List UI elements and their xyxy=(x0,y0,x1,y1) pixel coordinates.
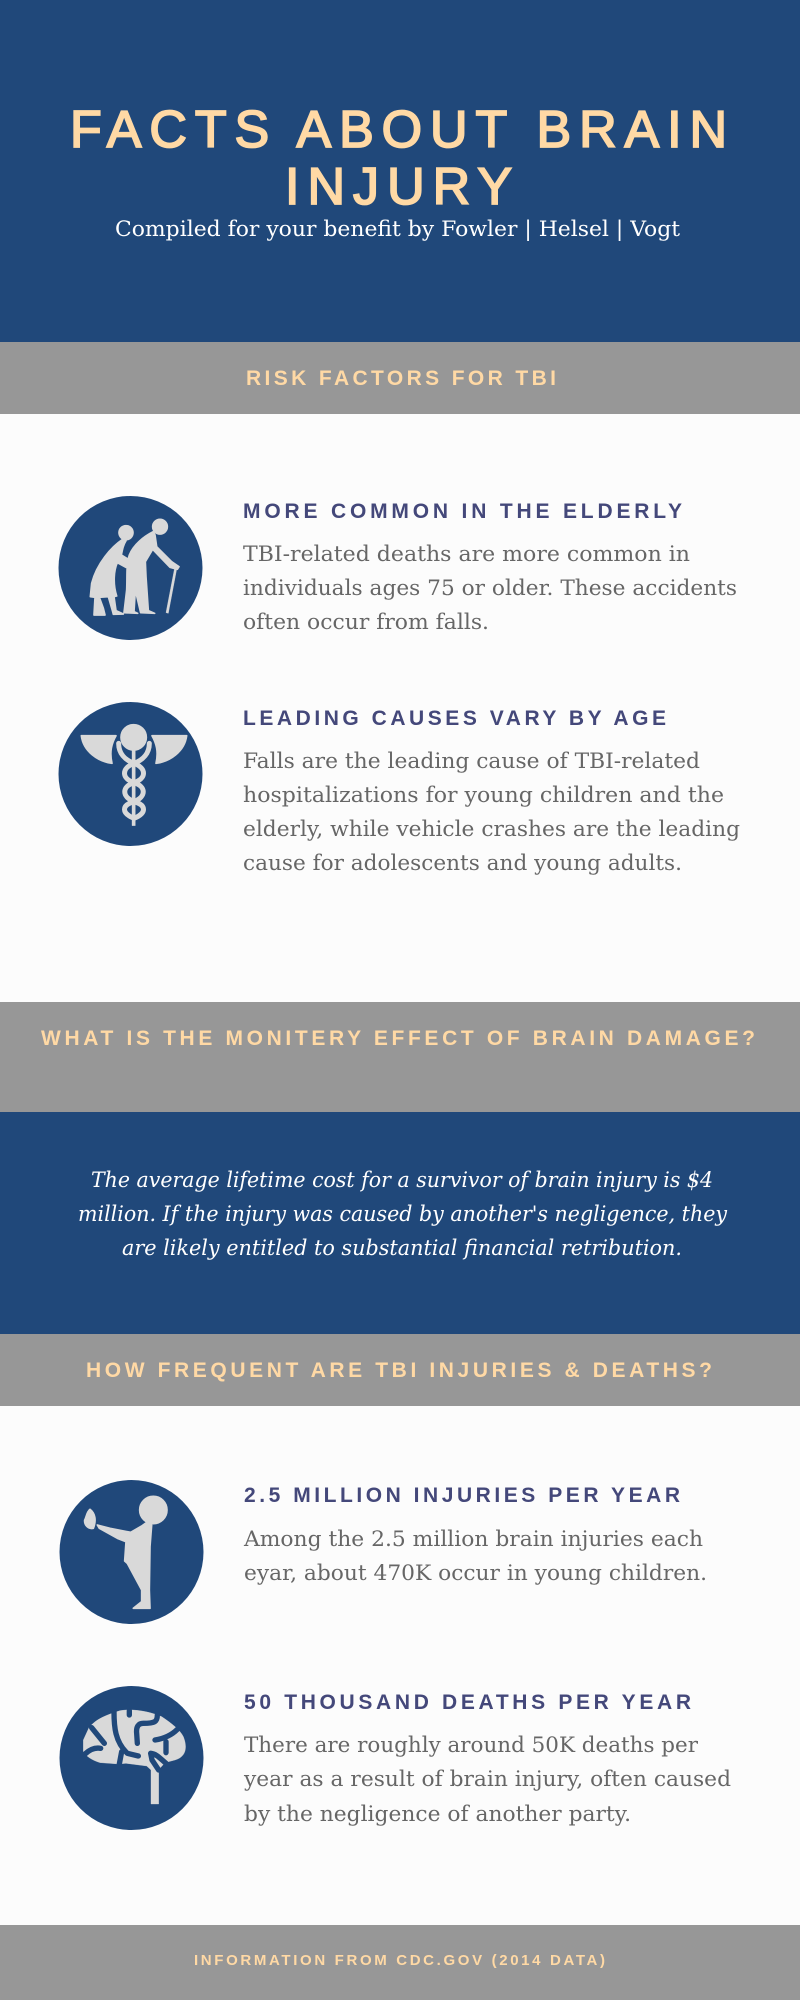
text block: elderly description: TBI-related deaths are more common in xyxy=(243,542,690,566)
text block: leading causes description xyxy=(243,749,740,875)
title: FACTS ABOUT BRAIN xyxy=(70,101,727,159)
section heading bar: monetary effect xyxy=(0,1002,800,1112)
heading: leading causes vary by age: LEADING CAUSES VARY BY AGE xyxy=(243,707,666,730)
title xyxy=(70,101,727,216)
icon: caduceus xyxy=(58,702,202,846)
text block: injuries description: Among the 2.5 million brain injuries each xyxy=(243,1527,703,1551)
section heading bar: risk factors xyxy=(0,342,800,414)
text block: leading causes description: cause for adolescents and young adults. xyxy=(243,851,682,875)
text block: leading causes description: elderly, while vehicle crashes are the leading xyxy=(243,817,740,841)
heading: 2.5 million injuries per year: 2.5 MILLION INJURIES PER YEAR xyxy=(244,1484,680,1507)
subtitle: Compiled for your benefit by Fowler | Helsel | Vogt xyxy=(115,217,681,242)
icon: brain xyxy=(60,1686,204,1830)
text block: deaths description xyxy=(243,1733,731,1826)
text block: elderly description: individuals ages 75 or older. These accidents xyxy=(243,576,737,600)
text block: deaths description: year as a result of brain injury, often caused xyxy=(243,1767,731,1791)
text block: deaths description: There are roughly around 50K deaths per xyxy=(244,1733,699,1757)
text block: injuries description xyxy=(243,1527,707,1585)
panel: elderly risk factor xyxy=(58,496,737,640)
section heading bar: frequency: HOW FREQUENT ARE TBI INJURIES & DEATHS? xyxy=(86,1359,712,1382)
icon: elderly couple xyxy=(58,496,202,640)
icon: child with butterfly xyxy=(60,1480,204,1624)
title: INJURY xyxy=(285,158,512,216)
text block: leading causes description: hospitalizations for young children and the xyxy=(243,783,724,807)
panel: deaths per year xyxy=(60,1686,731,1830)
panel: lifetime cost statement: million. If the injury was caused by another's negligence, they xyxy=(78,1202,728,1226)
text block: deaths description: by the negligence of another party. xyxy=(244,1802,631,1826)
panel: header xyxy=(0,0,800,342)
panel: leading causes risk factor xyxy=(58,702,740,875)
panel: lifetime cost statement: The average lifetime cost for a survivor of brain injury is $4 xyxy=(91,1168,713,1192)
section heading bar: monetary effect: WHAT IS THE MONITERY EFFECT OF BRAIN DAMAGE? xyxy=(41,1027,755,1050)
section heading bar: risk factors: RISK FACTORS FOR TBI xyxy=(246,367,556,390)
footer: source xyxy=(0,1925,800,2000)
heading: more common in the elderly: MORE COMMON IN THE ELDERLY xyxy=(243,500,682,523)
heading: 50 thousand deaths per year: 50 THOUSAND DEATHS PER YEAR xyxy=(244,1691,691,1714)
section heading bar: frequency xyxy=(0,1334,800,1406)
panel: lifetime cost statement: are likely entitled to substantial financial retribution. xyxy=(122,1236,682,1260)
footer: source: INFORMATION FROM CDC.GOV (2014 DATA) xyxy=(194,1952,605,1969)
text block: leading causes description: Falls are the leading cause of TBI-related xyxy=(243,749,700,773)
panel: injuries per year xyxy=(60,1480,707,1624)
text block: elderly description xyxy=(243,542,737,634)
text block: elderly description: often occur from falls. xyxy=(243,610,489,634)
panel: lifetime cost statement xyxy=(0,1112,800,1334)
text block: injuries description: eyar, about 470K occur in young children. xyxy=(244,1561,707,1585)
